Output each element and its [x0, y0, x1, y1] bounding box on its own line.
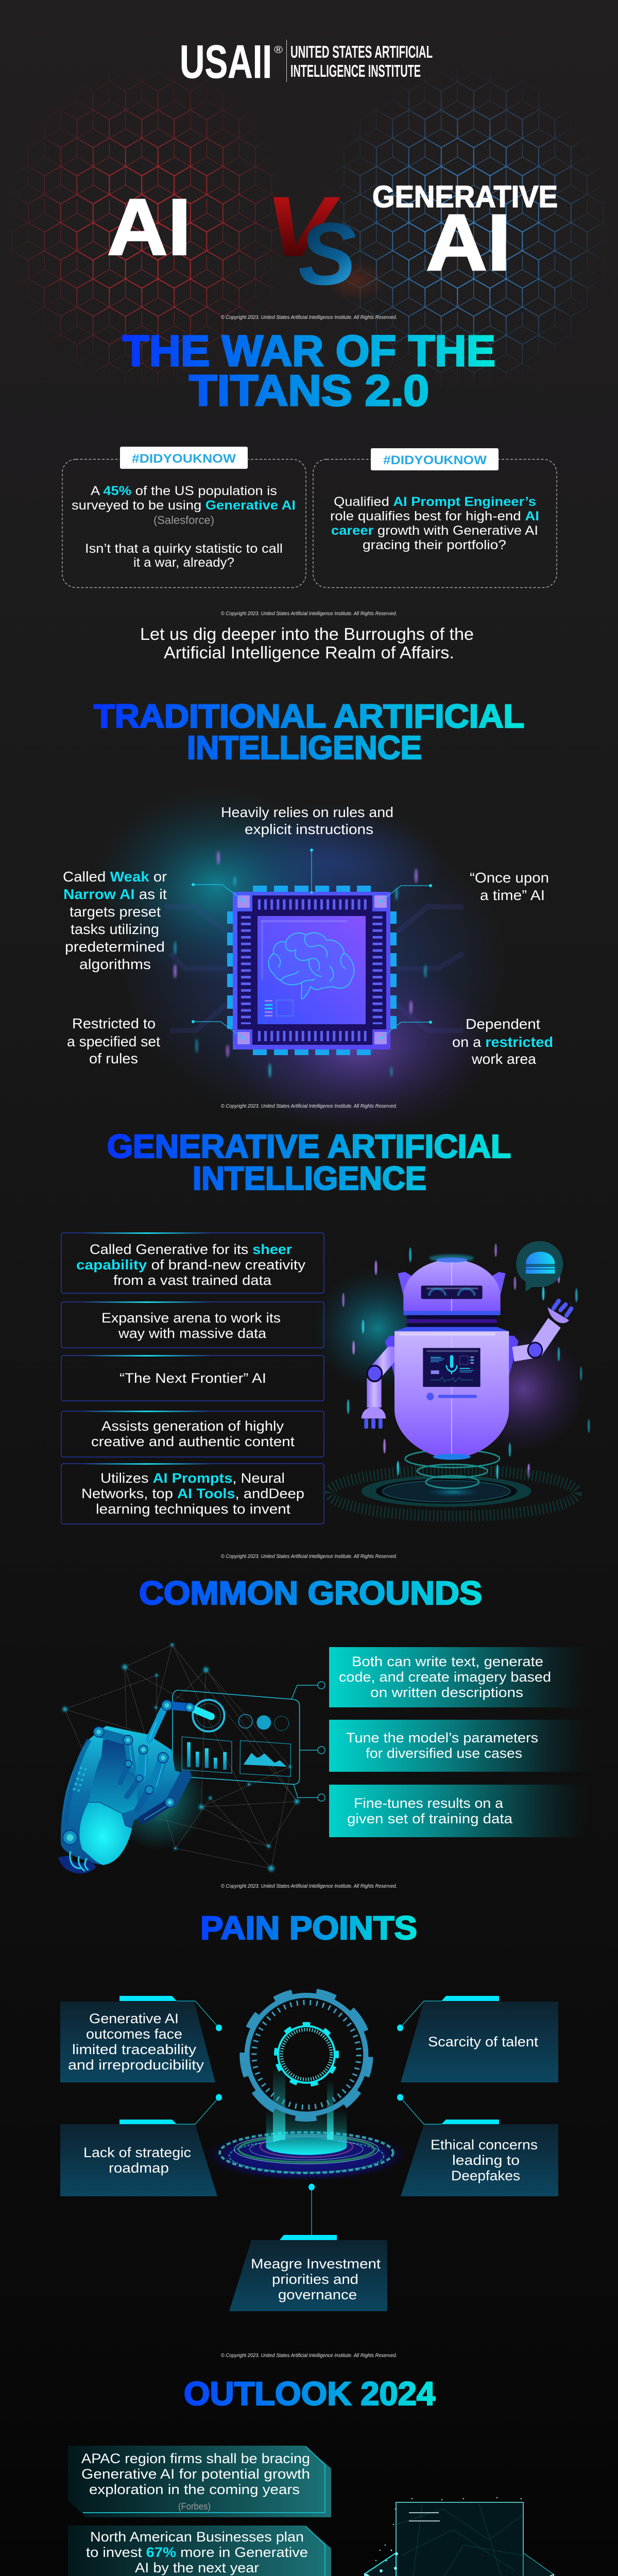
- heading: Outlook 2024: OUTLOOK 2024: [184, 2375, 435, 2412]
- common ground 2: Tune the model’s parameters: [346, 1730, 538, 1745]
- heading: Pain Points: PAIN POINTS: [200, 1909, 417, 1946]
- heading: Traditional Artificial Intelligence: INTELLIGENCE: [187, 729, 422, 766]
- trait box 4: creative and authentic content: [91, 1434, 295, 1449]
- pain point: deepfakes: Ethical concerns: [431, 2137, 538, 2153]
- callout: restricted rules: Restricted to: [72, 1015, 156, 1031]
- pain point: traceability: and irreproducibility: [68, 2057, 204, 2073]
- heading: Generative Artificial Intelligence: GENERATIVE ARTIFICIAL: [107, 1128, 511, 1165]
- badge right: [371, 448, 499, 470]
- heading: Common Grounds: COMMON GROUNDS: [139, 1574, 482, 1612]
- logo: USAII top: [180, 36, 433, 88]
- base disc: [205, 2129, 408, 2181]
- outlook card 2: AI by the next year: [135, 2560, 259, 2575]
- common ground 2: [329, 1720, 591, 1772]
- gear inner ring: [276, 2024, 337, 2085]
- trait box 3: [61, 1355, 324, 1401]
- stat text left: (Salesforce): [153, 514, 214, 527]
- body highlight and seam: [399, 1331, 495, 1460]
- pain point: traceability: Generative AI: [89, 2011, 179, 2026]
- letter text lines: [409, 2512, 440, 2521]
- dashboard bar chart: [182, 1737, 232, 1773]
- callout: restricted work area: [452, 1016, 553, 1067]
- stat text right: gracing their portfolio?: [363, 538, 506, 552]
- chip dark core: [237, 895, 386, 1045]
- trait box 1: Called Generative for its sheer: [90, 1242, 293, 1257]
- dashboard panel: [173, 1690, 300, 1784]
- callout: weak or narrow AI: Called Weak or: [63, 869, 167, 885]
- logo: USAII top: USAII: [180, 36, 272, 88]
- intro sentence: Let us dig deeper into the Burroughs of the: [140, 624, 474, 643]
- icon: brain: [269, 933, 354, 999]
- dashed frame right: [313, 460, 557, 587]
- floating sparks: [174, 851, 426, 1078]
- outlook card 1: (Forbes): [178, 2501, 211, 2512]
- stat text left: Isn’t that a quirky statistic to call: [85, 541, 283, 556]
- heading: Generative Artificial Intelligence: [107, 1128, 511, 1197]
- robot shoulder plate: [394, 1327, 509, 1331]
- speech bubble with burger icon: [516, 1241, 563, 1292]
- stat text left: A 45% of the US population is: [91, 484, 277, 498]
- pain point: investment: priorities and: [272, 2272, 358, 2287]
- connector: panel 3: [294, 1784, 325, 1801]
- copyright line: © Copyright 2023. United States Artificial Intelligence Institute. All Rights Reserved.: [221, 1883, 397, 1889]
- mesh nodes: [62, 1643, 300, 1872]
- common ground 2: for diversified use cases: [366, 1745, 522, 1761]
- stat text left: it a war, already?: [133, 555, 234, 570]
- common ground 1: [329, 1647, 591, 1707]
- hand glow: [110, 1747, 206, 1850]
- callout: once upon a time: [470, 870, 549, 903]
- connector: panel 2: [300, 1747, 325, 1754]
- trait box 2: [61, 1301, 324, 1348]
- pain point: investment: governance: [278, 2287, 357, 2302]
- hand palm: [61, 1726, 189, 1865]
- stat text right: career growth with Generative AI: [331, 523, 538, 538]
- callout: weak or narrow AI: algorithms: [79, 956, 151, 972]
- illustration: glowing envelope: [365, 2497, 567, 2576]
- connector: panel 1: [291, 1682, 325, 1699]
- robot floating sparks: [342, 1244, 590, 1479]
- chip glows: [93, 788, 510, 1133]
- trait box 4: Assists generation of highly: [101, 1418, 284, 1434]
- hand fingers: [99, 1705, 211, 1820]
- chip contact bars: [246, 905, 377, 1036]
- illustration: robot: [313, 1241, 590, 1516]
- trait box 1: from a vast trained data: [113, 1273, 272, 1288]
- callout: once upon a time: “Once upon: [470, 870, 549, 886]
- hand joint centres: [66, 1703, 192, 1841]
- pain point: traceability: outcomes face: [86, 2026, 182, 2042]
- callout: weak or narrow AI: [63, 869, 167, 972]
- trait box 3: “The Next Frontier” AI: [119, 1370, 266, 1386]
- wrist cable: [63, 1851, 93, 1871]
- robot hover rings: [405, 1450, 500, 1488]
- pillar base: [266, 2139, 347, 2155]
- trait box 4: [61, 1411, 324, 1457]
- logo: USAII top: INTELLIGENCE INSTITUTE: [290, 61, 421, 80]
- heading: Traditional Artificial Intelligence: [94, 698, 524, 766]
- gear outer ring: [243, 1991, 370, 2119]
- chip pins: [227, 886, 397, 1055]
- hexagon pattern: red left: [8, 71, 287, 387]
- body status indicator: [426, 1393, 477, 1400]
- hero S letter: S: [298, 205, 356, 303]
- intro sentence: Artificial Intelligence Realm of Affairs.: [164, 643, 454, 662]
- callout: rules: Heavily relies on rules and: [221, 804, 393, 820]
- robot ears: [398, 1272, 506, 1299]
- robot base platform: [330, 1470, 577, 1516]
- head center seam: [451, 1262, 452, 1311]
- stat text right: role qualifies best for high-end AI: [330, 509, 539, 523]
- hero V letter: V: [265, 179, 341, 275]
- common ground 1: code, and create imagery based: [339, 1669, 551, 1685]
- logo: USAII top: UNITED STATES ARTIFICIAL: [290, 42, 433, 61]
- outlook card 1: APAC region firms shall be bracing: [81, 2451, 310, 2466]
- callout: restricted work area: on a restricted: [452, 1034, 553, 1050]
- pain point: deepfakes: Deepfakes: [451, 2168, 520, 2183]
- robot background glows: [313, 1268, 586, 1452]
- callout: restricted work area: Dependent: [466, 1016, 540, 1032]
- outlook card 2: [68, 2526, 331, 2576]
- faint circuit traces: [165, 907, 464, 1030]
- connector lines: [193, 850, 431, 1038]
- copyright line: © Copyright 2023. United States Artificial Intelligence Institute. All Rights Reserved.: [221, 314, 397, 320]
- hand rivets: [73, 1767, 87, 1792]
- hero glow behind VS: [324, 260, 386, 301]
- pain point: deepfakes: leading to: [452, 2153, 520, 2168]
- callout: once upon a time: a time” AI: [480, 887, 545, 903]
- pain point: investment: Meagre Investment: [251, 2256, 381, 2272]
- outlook card 1: Generative AI for potential growth: [81, 2466, 310, 2482]
- pain point: investment: [229, 2183, 387, 2311]
- trait box 5: Networks, top AI Tools , andDeep: [81, 1486, 304, 1501]
- trait box 1: [61, 1232, 324, 1293]
- copyright line: © Copyright 2023. United States Artificial Intelligence Institute. All Rights Reserved.: [221, 1103, 397, 1109]
- copyright line: © Copyright 2023. United States Artificial Intelligence Institute. All Rights Reserved.: [221, 611, 397, 617]
- panel list: outlook: [68, 2446, 331, 2576]
- callout: restricted rules: of rules: [89, 1050, 138, 1066]
- panel list: pain points: [60, 1996, 558, 2311]
- pain point: deepfakes: [397, 2094, 558, 2196]
- copyright line: © Copyright 2023. United States Artificial Intelligence Institute. All Rights Reserved.: [221, 1553, 397, 1560]
- chip body: [233, 892, 390, 1049]
- callout: weak or narrow AI: predetermined: [65, 939, 165, 955]
- chest screen: [423, 1348, 480, 1387]
- panel: did you know right: [313, 448, 557, 587]
- copyright line: © Copyright 2023. United States Artificial Intelligence Institute. All Rights Reserved.: [221, 2352, 397, 2359]
- pain point: roadmap: [60, 2094, 222, 2196]
- callout: weak or narrow AI: Narrow AI as it: [63, 886, 167, 902]
- hand joints: [63, 1700, 194, 1845]
- light pillars: [266, 2066, 347, 2152]
- callout: rules: [221, 804, 393, 837]
- envelope body: [365, 2574, 555, 2576]
- trait box 2: Expansive arena to work its: [101, 1310, 281, 1326]
- heading: The War of the Titans 2.0: [123, 327, 495, 415]
- stat text left: surveyed to be using Generative AI: [72, 498, 296, 513]
- pain point: traceability: [60, 1996, 222, 2082]
- envelope particles: [365, 2497, 554, 2576]
- outlook card 1: [68, 2446, 331, 2517]
- callout: restricted work area: work area: [471, 1051, 536, 1067]
- trait box 2: way with massive data: [118, 1326, 267, 1341]
- hexagon pattern: blue right: [327, 71, 607, 387]
- stat text right: Qualified AI Prompt Engineer’s: [334, 495, 536, 509]
- logo: USAII top: ®: [274, 45, 283, 56]
- chip callouts: traditional AI traits: [63, 804, 553, 1067]
- stat text left: [72, 484, 296, 570]
- panel list: generative AI traits: [61, 1232, 324, 1524]
- trait box 5: learning techniques to invent: [96, 1501, 291, 1517]
- heading: Generative Artificial Intelligence: INTELLIGENCE: [193, 1160, 426, 1197]
- pain point: traceability: limited traceability: [72, 2042, 197, 2057]
- illustration: holographic gear: [205, 1991, 408, 2181]
- panel list: common grounds: [291, 1647, 591, 1837]
- outlook card 2: North American Businesses plan: [90, 2529, 304, 2545]
- callout: rules: explicit instructions: [245, 821, 373, 837]
- common ground 3: given set of training data: [347, 1811, 513, 1826]
- envelope letter: [396, 2502, 523, 2576]
- illustration: robot hand touching dashboard: [61, 1643, 300, 1872]
- outlook card 2: to invest 67% more in Generative: [86, 2545, 308, 2560]
- robot body: [394, 1331, 509, 1458]
- pain point: talent: Scarcity of talent: [428, 2034, 539, 2049]
- callout: restricted rules: a specified set: [67, 1033, 160, 1049]
- network mesh: [65, 1645, 297, 1869]
- heading: The War of the Titans 2.0: THE WAR OF THE: [123, 327, 495, 375]
- common ground 3: Fine-tunes results on a: [354, 1795, 504, 1811]
- connector dots: [192, 849, 432, 1040]
- chip corner pads: [237, 895, 387, 1044]
- common ground 1: Both can write text, generate: [352, 1654, 543, 1669]
- outlook card 1: exploration in the coming years: [89, 2482, 300, 2497]
- letter mesh: [396, 2504, 523, 2576]
- badge left: #DIDYOUKNOW: [132, 452, 236, 466]
- badge right: #DIDYOUKNOW: [383, 453, 487, 467]
- trait box 5: Utilizes AI Prompts , Neural: [100, 1470, 285, 1486]
- callout: weak or narrow AI: tasks utilizing: [71, 921, 159, 937]
- dashed frame left: [62, 460, 306, 587]
- dashboard area chart: [240, 1740, 290, 1776]
- robot left arm: [362, 1336, 394, 1429]
- hero left AI: AI: [107, 182, 191, 272]
- panel: did you know left: [62, 447, 306, 587]
- robot right arm: [509, 1301, 571, 1376]
- trait box 5: [61, 1463, 324, 1524]
- illustration: AI chip with brain: [93, 788, 510, 1133]
- chip screen: [258, 916, 366, 1024]
- callout: weak or narrow AI: targets preset: [70, 904, 161, 920]
- robot visor: [421, 1285, 483, 1299]
- robot neck: [403, 1311, 501, 1327]
- dashboard indicators: [193, 1700, 289, 1732]
- robot head: [403, 1260, 501, 1311]
- head glow cap: [430, 1255, 474, 1262]
- heading: The War of the Titans 2.0: TITANS 2.0: [189, 366, 429, 415]
- hero title: AI vs Generative AI: [107, 179, 558, 303]
- hero right AI: AI: [426, 198, 511, 287]
- callout: restricted rules: [67, 1015, 160, 1066]
- hero GENERATIVE: GENERATIVE: [372, 180, 558, 214]
- heading: Traditional Artificial Intelligence: TRADITIONAL ARTIFICIAL: [94, 698, 524, 735]
- stat text right: [330, 495, 539, 552]
- pain point: roadmap: Lack of strategic: [83, 2145, 191, 2160]
- trait box 1: capability of brand-new creativity: [76, 1257, 306, 1273]
- pain point: roadmap: roadmap: [109, 2160, 169, 2176]
- common ground 1: on written descriptions: [370, 1685, 523, 1700]
- pain point: talent: [397, 1996, 558, 2082]
- intro sentence: [140, 624, 474, 662]
- envelope back flaps: [365, 2553, 554, 2576]
- badge left: [120, 447, 248, 469]
- common ground 3: [329, 1785, 591, 1837]
